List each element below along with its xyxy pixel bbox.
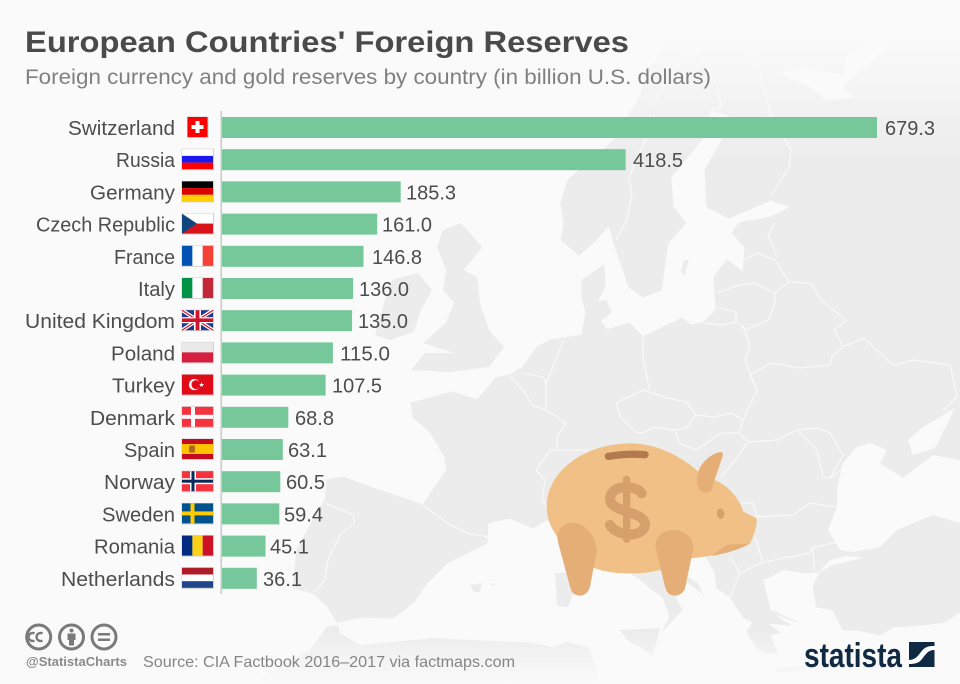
row: Italy: Italy [138,279,175,301]
row: Germany: 185.3 [406,182,456,204]
row: France [114,245,422,269]
row: Sweden [102,503,323,526]
row: United Kingdom: United Kingdom [25,311,175,333]
row: United Kingdom: 135.0 [358,311,408,333]
statista logo: statista [804,637,903,675]
row: Italy: 136.0 [359,279,409,301]
row: Poland: 115.0 [340,343,390,365]
row: Netherlands: Netherlands [61,569,175,591]
icon: piggy bank [547,443,757,596]
row: Poland: Poland [111,343,175,365]
row: Netherlands: 36.1 [263,569,302,591]
row: Czech Republic: 161.0 [382,215,432,237]
row: Norway: 60.5 [286,472,325,494]
row: Russia [116,149,683,172]
row: Switzerland: 679.3 [885,118,935,140]
row: Netherlands [61,567,302,591]
row: Switzerland [68,116,935,140]
row: France: France [114,247,175,269]
row: Spain: Spain [124,440,175,462]
row: United Kingdom [25,310,408,333]
row: Turkey [112,374,382,398]
row: Romania: Romania [94,537,176,559]
row: Sweden: 59.4 [284,504,323,526]
title: European Countries' Foreign Reserves [25,26,629,59]
row: Turkey: 107.5 [332,376,382,398]
row: Czech Republic: Czech Republic [36,215,175,237]
row: Denmark: 68.8 [295,408,334,430]
row: Norway: Norway [104,472,175,494]
icon: creative commons badges [27,625,116,649]
row: Czech Republic [36,213,432,237]
row: Poland [111,342,390,365]
row: Sweden: Sweden [102,504,175,526]
row: Romania [94,535,309,559]
bar chart [25,111,935,594]
row: Spain [124,438,327,462]
row: Turkey: Turkey [112,376,175,398]
row: Russia: Russia [116,150,176,172]
row: Germany [90,181,456,204]
row: Germany: Germany [90,182,175,204]
row: Denmark [90,406,334,430]
row: France: 146.8 [372,247,422,269]
source: Source: CIA Factbook 2016–2017 via factmaps.com [143,654,515,671]
social handle: @StatistaCharts [26,655,127,669]
row: Norway [104,471,325,494]
row: Switzerland: Switzerland [68,118,175,140]
row: Spain: 63.1 [288,440,327,462]
subtitle: Foreign currency and gold reserves by country (in billion U.S. dollars) [25,66,711,89]
row: Italy [138,278,409,301]
row: Romania: 45.1 [270,537,309,559]
row: Denmark: Denmark [90,408,176,430]
row: Russia: 418.5 [633,150,683,172]
